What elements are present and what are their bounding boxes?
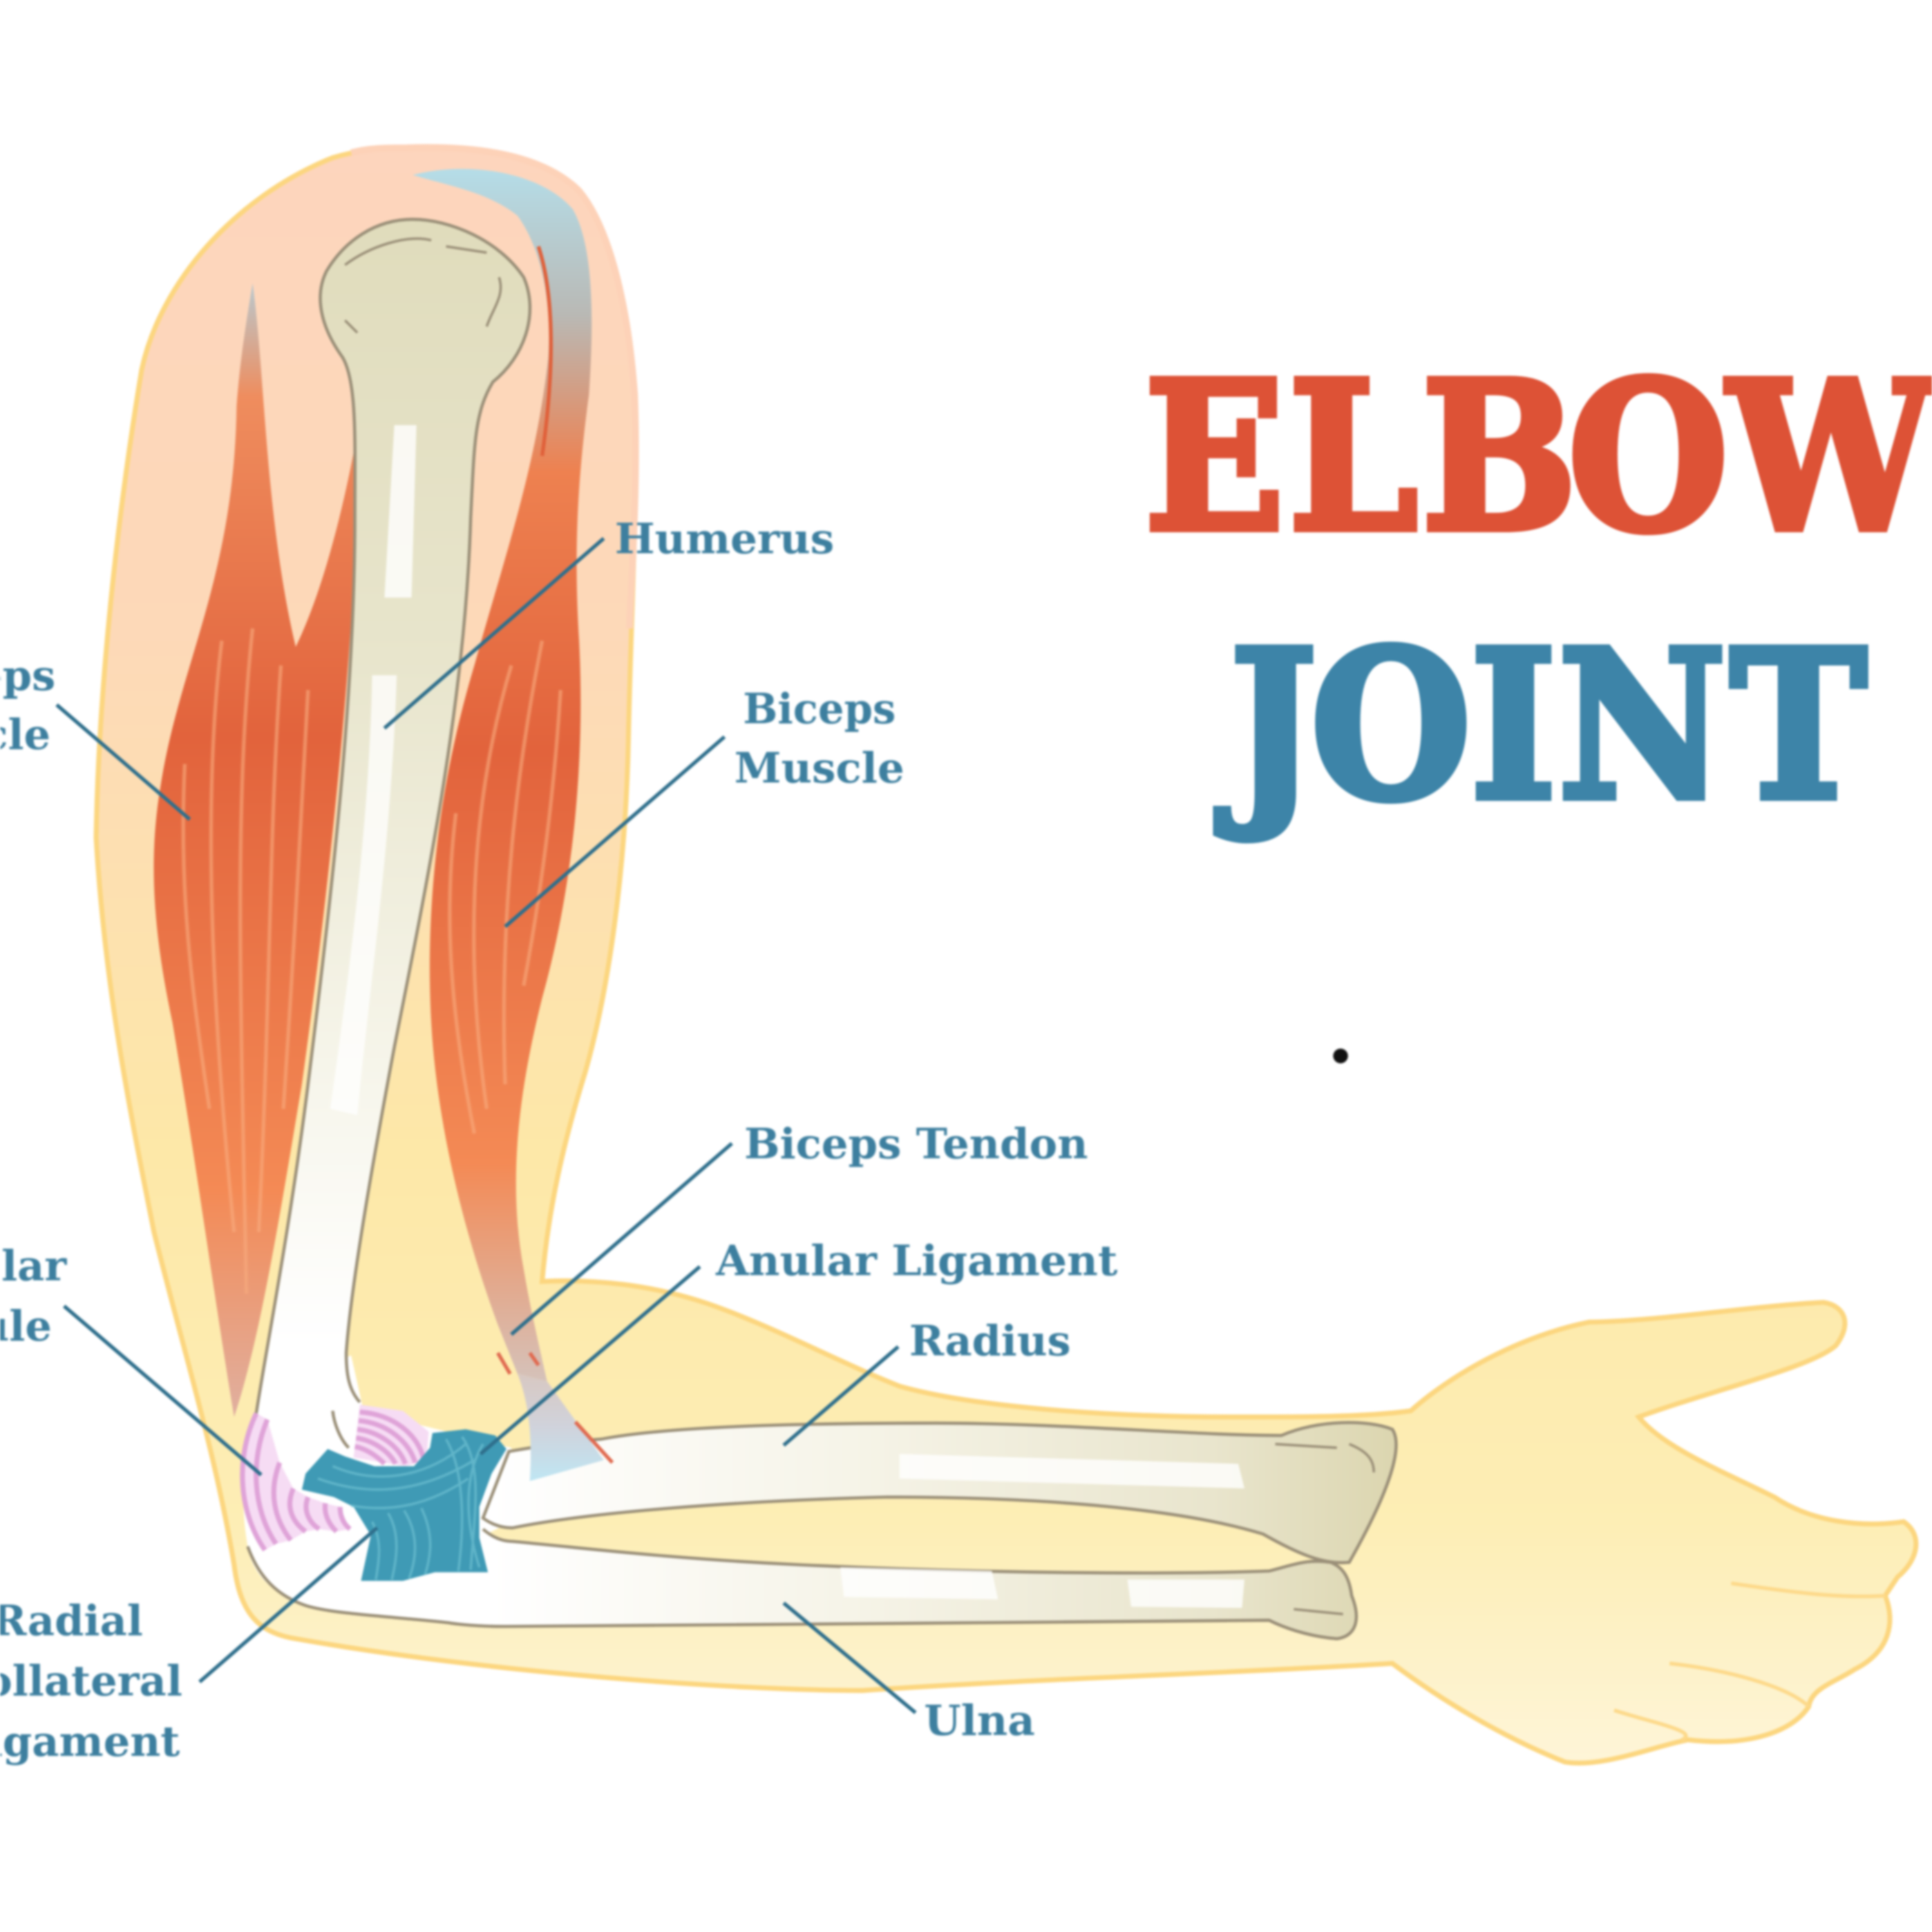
label: biceps tendon: [511, 1119, 1088, 1334]
label: biceps tendon: Biceps Tendon: [744, 1119, 1088, 1168]
label: radial collateral ligament: [0, 1528, 377, 1766]
black dot: [1333, 1048, 1348, 1063]
label: radius: Radius: [909, 1317, 1071, 1366]
label: biceps muscle: Biceps: [743, 685, 896, 734]
label: biceps muscle: [505, 685, 904, 927]
label: ulna: [784, 1603, 1035, 1745]
label: humerus: Humerus: [615, 515, 834, 564]
triceps muscle: [154, 283, 360, 1417]
elbow capsule pink: [242, 1405, 429, 1550]
title: ELBOW: [1144, 337, 1932, 577]
label: ulna: Ulna: [924, 1696, 1035, 1745]
peach upper arm edge: [351, 147, 636, 629]
radius bone: [483, 1423, 1396, 1563]
label: triceps muscle: [0, 651, 190, 819]
label: anular ligament: [480, 1236, 1117, 1454]
label: anular capsule: [0, 1242, 261, 1475]
label: anular ligament: Anular Ligament: [715, 1236, 1117, 1285]
biceps tendon tip: [498, 1353, 612, 1481]
humerus bone: [256, 220, 530, 1466]
wrist and finger creases: [1614, 1584, 1885, 1740]
label: radius: [784, 1317, 1071, 1445]
title: JOINT: [1215, 605, 1867, 846]
white elbow area: [243, 1356, 739, 1623]
ulna bone: [248, 1529, 1356, 1639]
label: humerus: [384, 515, 834, 728]
title: [1144, 337, 1932, 846]
anular and radial collateral ligaments: [302, 1429, 506, 1581]
biceps muscle: [413, 169, 592, 1381]
label: biceps muscle: Muscle: [734, 744, 904, 793]
arm silhouette: [96, 147, 1916, 1763]
